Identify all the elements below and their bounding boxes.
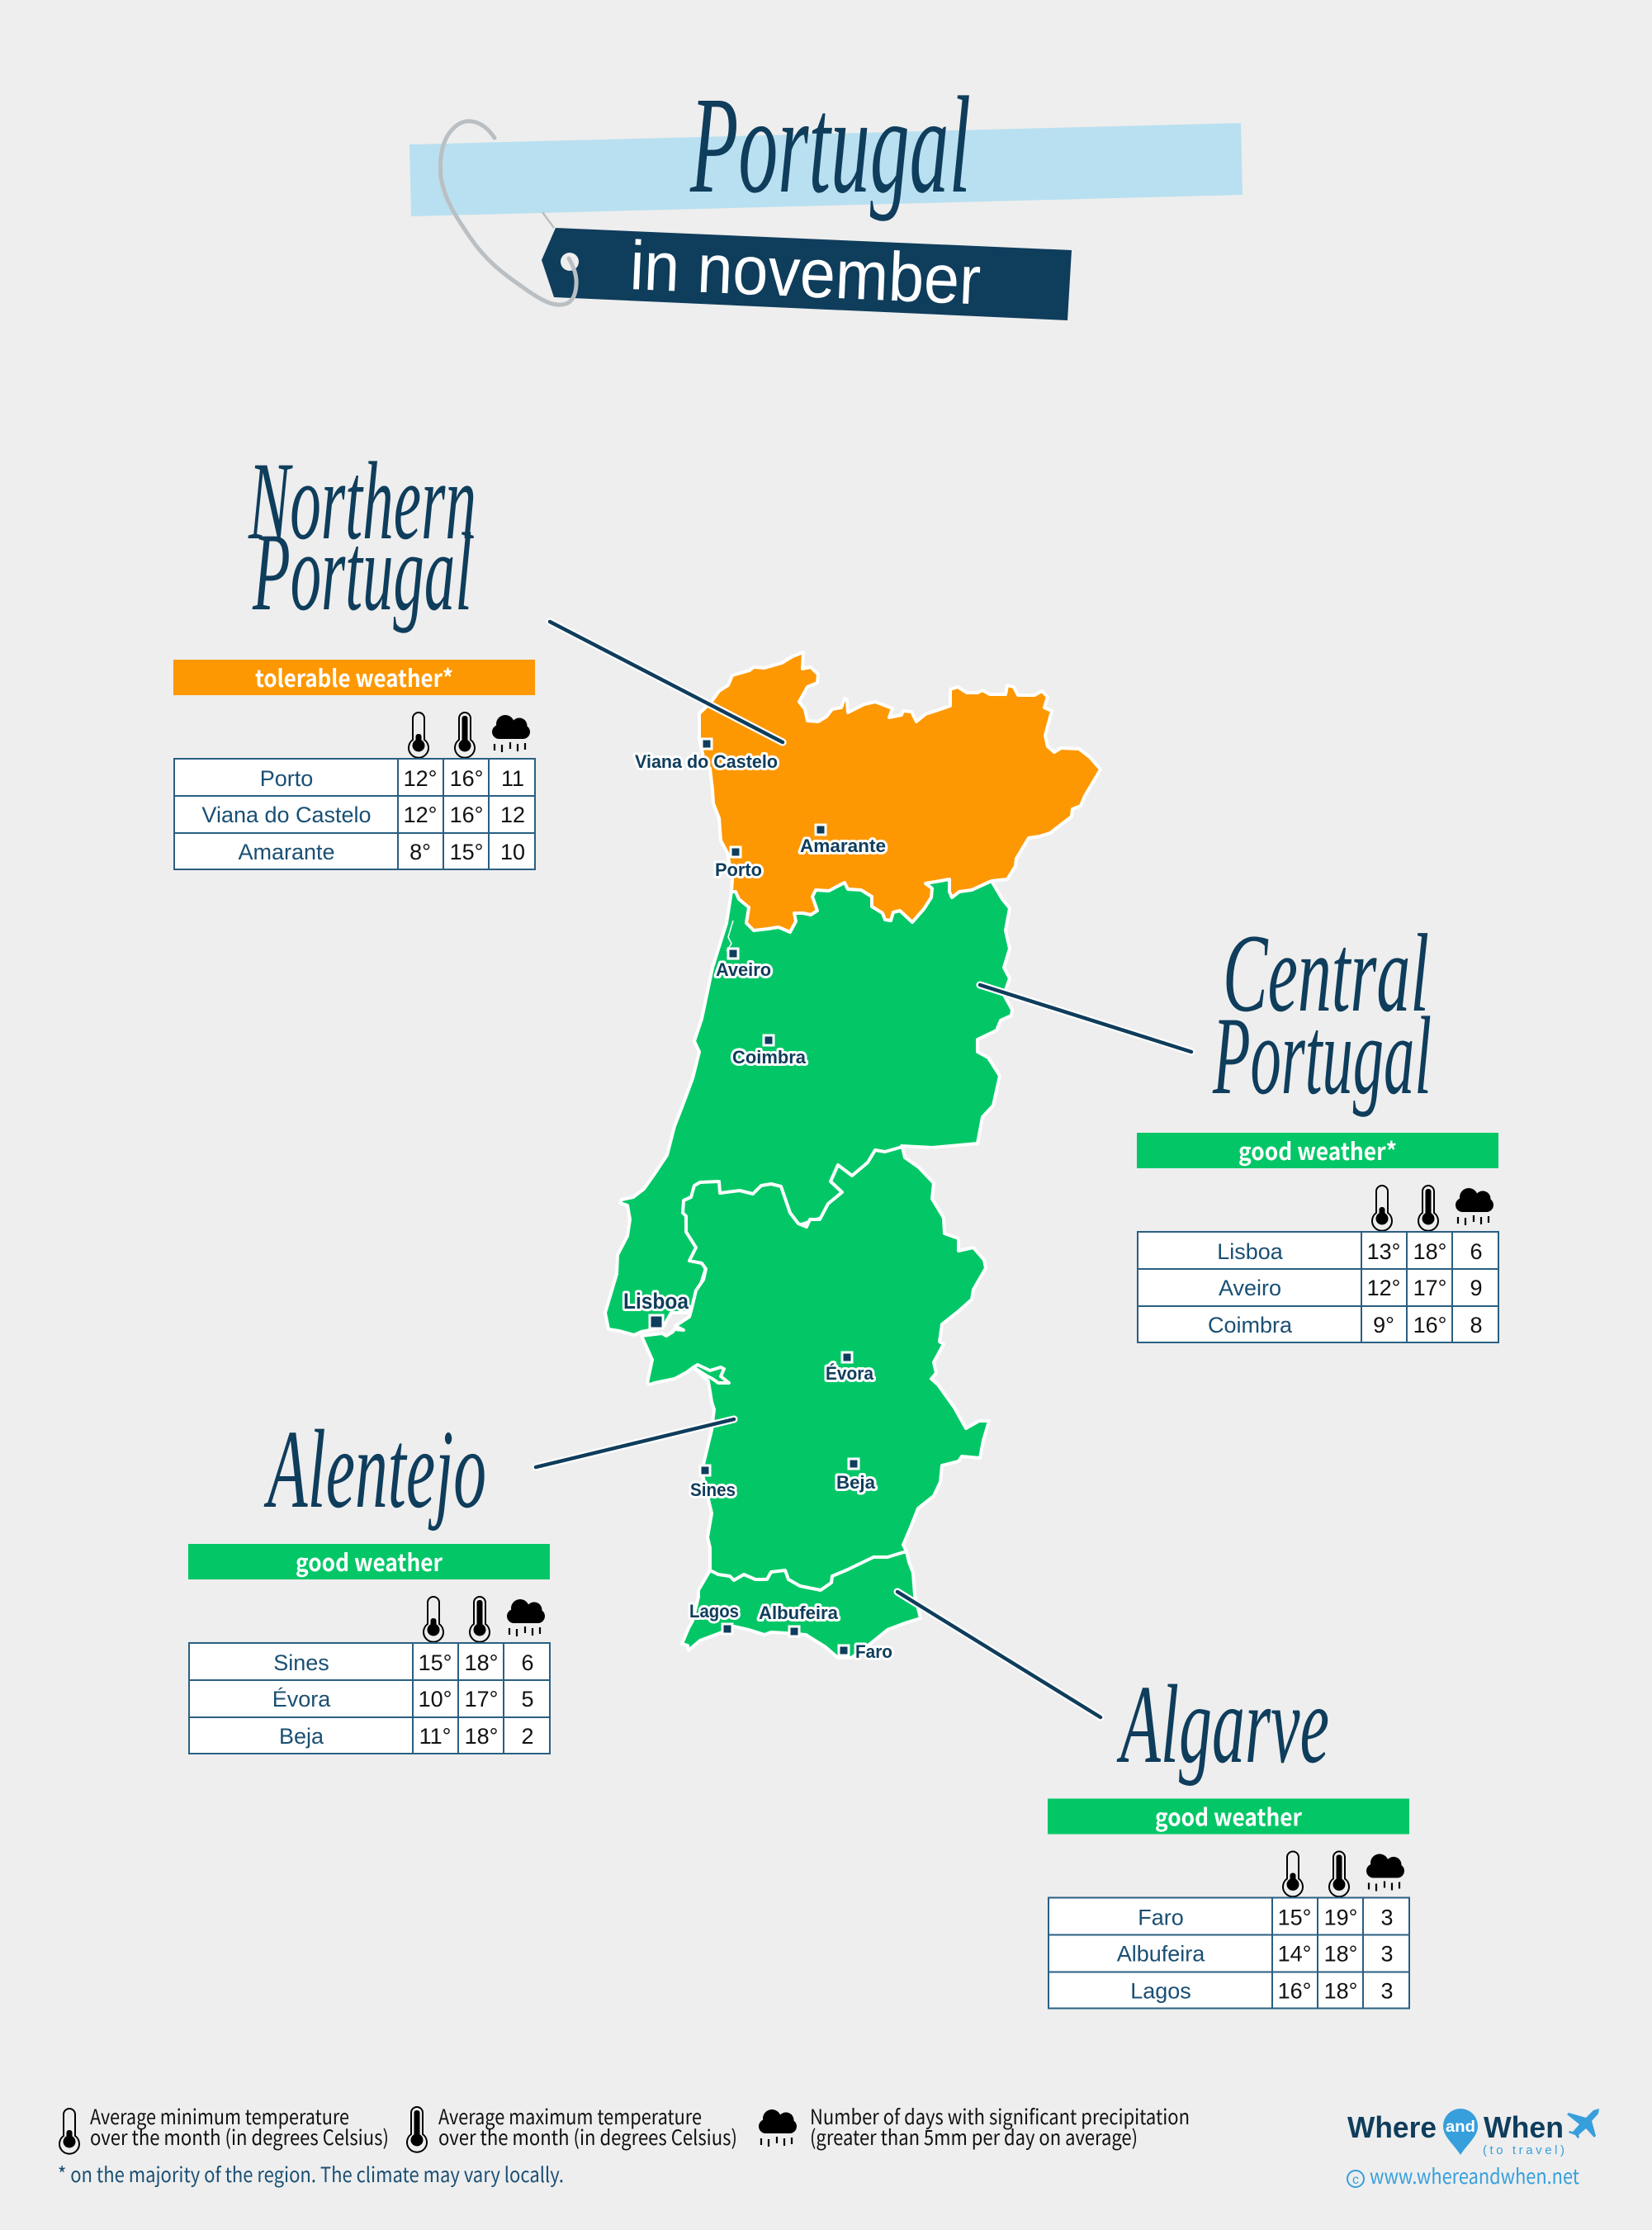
table: 10 bbox=[500, 840, 525, 864]
legend: precipitation: (greater than 5mm per day on average) bbox=[810, 2122, 1138, 2152]
legend: minimum temperature: over the month (in degrees Celsius) bbox=[90, 2122, 389, 2152]
city: Coimbra: Coimbra bbox=[732, 1047, 807, 1068]
heading: Alentejo: Alentejo bbox=[263, 1407, 486, 1532]
Aveiro lagoon bbox=[727, 921, 733, 951]
city: Amarante: Amarante bbox=[800, 836, 886, 856]
city: Viana do Castelo: Viana do Castelo bbox=[635, 751, 778, 772]
weather badge: good weather* bbox=[1238, 1133, 1397, 1167]
city: Aveiro bbox=[716, 949, 771, 980]
title band bbox=[409, 123, 1243, 216]
table: 9 bbox=[1470, 1276, 1483, 1300]
table: 15° bbox=[450, 840, 483, 864]
table bbox=[189, 1643, 550, 1754]
panel: Alentejo bbox=[188, 1407, 550, 1754]
table: 17° bbox=[465, 1687, 498, 1712]
legend: maximum temperature: over the month (in degrees Celsius) bbox=[438, 2122, 737, 2152]
table: 12° bbox=[404, 766, 437, 791]
connector: Alentejo bbox=[536, 1419, 734, 1467]
weather badge bbox=[1048, 1798, 1409, 1835]
table: 6 bbox=[521, 1650, 534, 1675]
heading: Central Portugal: Central bbox=[1223, 911, 1429, 1035]
title: Portugal: Portugal bbox=[689, 68, 971, 222]
legend: minimum temperature bbox=[59, 2101, 389, 2154]
heading: Northern Portugal: Northern bbox=[248, 439, 476, 563]
table: Amarante bbox=[238, 840, 335, 864]
table: Beja bbox=[279, 1724, 324, 1749]
table: 16° bbox=[450, 803, 483, 827]
table bbox=[174, 759, 535, 869]
city: Sines bbox=[690, 1465, 736, 1500]
city: Beja: Beja bbox=[836, 1472, 876, 1493]
table: 3 bbox=[1380, 1978, 1394, 2003]
table: Viana do Castelo bbox=[201, 803, 372, 827]
region: Northern Portugal bbox=[699, 652, 1101, 932]
tag hole bbox=[561, 253, 579, 271]
table: 16° bbox=[450, 766, 483, 791]
logo and: and bbox=[1446, 2119, 1475, 2136]
website: www.whereandwhen.net bbox=[1370, 2161, 1579, 2190]
table: Coimbra bbox=[1208, 1313, 1293, 1338]
table: Porto bbox=[260, 766, 313, 791]
logo: Where and When bbox=[1347, 2109, 1599, 2190]
table: 16° bbox=[1413, 1313, 1446, 1338]
map of Portugal bbox=[605, 652, 1101, 1658]
city: Viana do Castelo bbox=[635, 739, 778, 772]
logo pin bbox=[1443, 2109, 1478, 2155]
city: Lisboa: Lisboa bbox=[623, 1289, 689, 1314]
logo wordmark: Where bbox=[1347, 2110, 1437, 2144]
table: 16° bbox=[1278, 1978, 1311, 2003]
website: c bbox=[1352, 2173, 1359, 2187]
weather badge bbox=[173, 660, 535, 695]
table: Lisboa bbox=[1217, 1239, 1284, 1264]
table: 5 bbox=[521, 1687, 534, 1712]
connector: Algarve bbox=[897, 1592, 1101, 1717]
tag ring bbox=[440, 121, 576, 305]
city: Beja bbox=[836, 1459, 876, 1493]
legend bbox=[58, 2101, 1190, 2189]
weather badge: good weather bbox=[296, 1544, 443, 1579]
logo tagline: (to travel) bbox=[1483, 2143, 1564, 2157]
legend: precipitation: Number of days with significant precipitation bbox=[810, 2101, 1190, 2131]
city: Évora bbox=[826, 1352, 874, 1384]
region: Algarve bbox=[682, 1551, 921, 1658]
city: Amarante bbox=[800, 825, 886, 856]
icons bbox=[424, 1597, 545, 1642]
legend: precipitation bbox=[759, 2101, 1190, 2152]
table: 15° bbox=[1278, 1906, 1311, 1930]
table bbox=[1048, 1897, 1409, 2008]
logo wordmark 2: When bbox=[1484, 2110, 1564, 2144]
table: 3 bbox=[1380, 1942, 1394, 1967]
heading: Central Portugal bbox=[1212, 911, 1432, 1118]
city: Lagos: Lagos bbox=[689, 1601, 739, 1622]
heading: Northern Portugal: Portugal bbox=[252, 510, 472, 634]
connector: Northern Portugal bbox=[550, 622, 783, 742]
legend: minimum temperature: Average minimum temperature bbox=[90, 2101, 349, 2131]
subtitle: in november: in november bbox=[628, 226, 982, 320]
heading: Central Portugal: Portugal bbox=[1212, 994, 1432, 1118]
table: Évora bbox=[272, 1687, 331, 1712]
table: 18° bbox=[1413, 1239, 1446, 1264]
panel: Algarve bbox=[1048, 1662, 1409, 2008]
city: Albufeira bbox=[759, 1603, 839, 1636]
heading: Northern Portugal bbox=[248, 439, 476, 634]
table: 18° bbox=[465, 1724, 498, 1749]
city: Lagos bbox=[689, 1601, 739, 1634]
table: Lagos bbox=[1130, 1978, 1191, 2003]
table: 8° bbox=[409, 840, 431, 864]
footnote: * on the majority of the region. The climate may vary locally. bbox=[58, 2159, 564, 2189]
city: Albufeira: Albufeira bbox=[759, 1603, 839, 1623]
table: Albufeira bbox=[1117, 1942, 1205, 1967]
city: Coimbra bbox=[732, 1035, 807, 1068]
heading: Algarve: Algarve bbox=[1116, 1662, 1329, 1787]
weather badge: tolerable weather* bbox=[255, 660, 453, 694]
table: 12° bbox=[404, 803, 437, 827]
legend: maximum temperature: Average maximum temperature bbox=[438, 2101, 702, 2131]
table: Aveiro bbox=[1219, 1276, 1281, 1300]
table: 3 bbox=[1380, 1906, 1394, 1930]
legend: maximum temperature bbox=[407, 2101, 737, 2152]
table bbox=[1138, 1232, 1498, 1342]
table: 6 bbox=[1470, 1239, 1483, 1264]
icons bbox=[409, 713, 530, 758]
weather badge bbox=[188, 1544, 550, 1579]
table: 11 bbox=[501, 766, 524, 791]
table: 13° bbox=[1367, 1239, 1400, 1264]
tag string bbox=[542, 212, 554, 228]
connector: Central Portugal bbox=[980, 985, 1191, 1052]
region: Alentejo bbox=[641, 1147, 989, 1593]
weather badge bbox=[1137, 1133, 1498, 1168]
region: Central Portugal bbox=[605, 867, 1012, 1335]
icons bbox=[1372, 1186, 1493, 1231]
city: Faro bbox=[839, 1641, 892, 1662]
table: 15° bbox=[419, 1650, 452, 1675]
table: 12° bbox=[1367, 1276, 1400, 1300]
table: Faro bbox=[1138, 1906, 1184, 1930]
table: 14° bbox=[1278, 1942, 1311, 1967]
table: 18° bbox=[1324, 1942, 1357, 1967]
panel: Central Portugal bbox=[1137, 911, 1498, 1342]
tag bbox=[542, 228, 1072, 320]
table: 2 bbox=[521, 1724, 534, 1749]
title block bbox=[409, 68, 1243, 320]
table: 8 bbox=[1470, 1313, 1483, 1338]
table: 12 bbox=[500, 803, 525, 827]
city: Sines: Sines bbox=[690, 1480, 736, 1500]
table: 10° bbox=[419, 1687, 452, 1712]
table: 17° bbox=[1413, 1276, 1446, 1300]
table: 18° bbox=[1324, 1978, 1357, 2003]
city: Porto bbox=[715, 847, 762, 880]
city: Porto: Porto bbox=[715, 859, 762, 880]
city: Faro: Faro bbox=[855, 1641, 892, 1662]
table: 19° bbox=[1324, 1906, 1357, 1930]
table: Sines bbox=[273, 1650, 329, 1675]
weather badge: good weather bbox=[1155, 1798, 1302, 1833]
table: 11° bbox=[419, 1724, 451, 1749]
table: 18° bbox=[465, 1650, 498, 1675]
panel: Northern Portugal bbox=[173, 439, 535, 869]
city: Lisboa bbox=[623, 1289, 689, 1328]
logo plane bbox=[1567, 2109, 1599, 2138]
icons bbox=[1283, 1851, 1404, 1896]
city: Évora: Évora bbox=[826, 1363, 874, 1384]
table: 9° bbox=[1373, 1313, 1394, 1338]
city: Aveiro: Aveiro bbox=[716, 959, 771, 980]
